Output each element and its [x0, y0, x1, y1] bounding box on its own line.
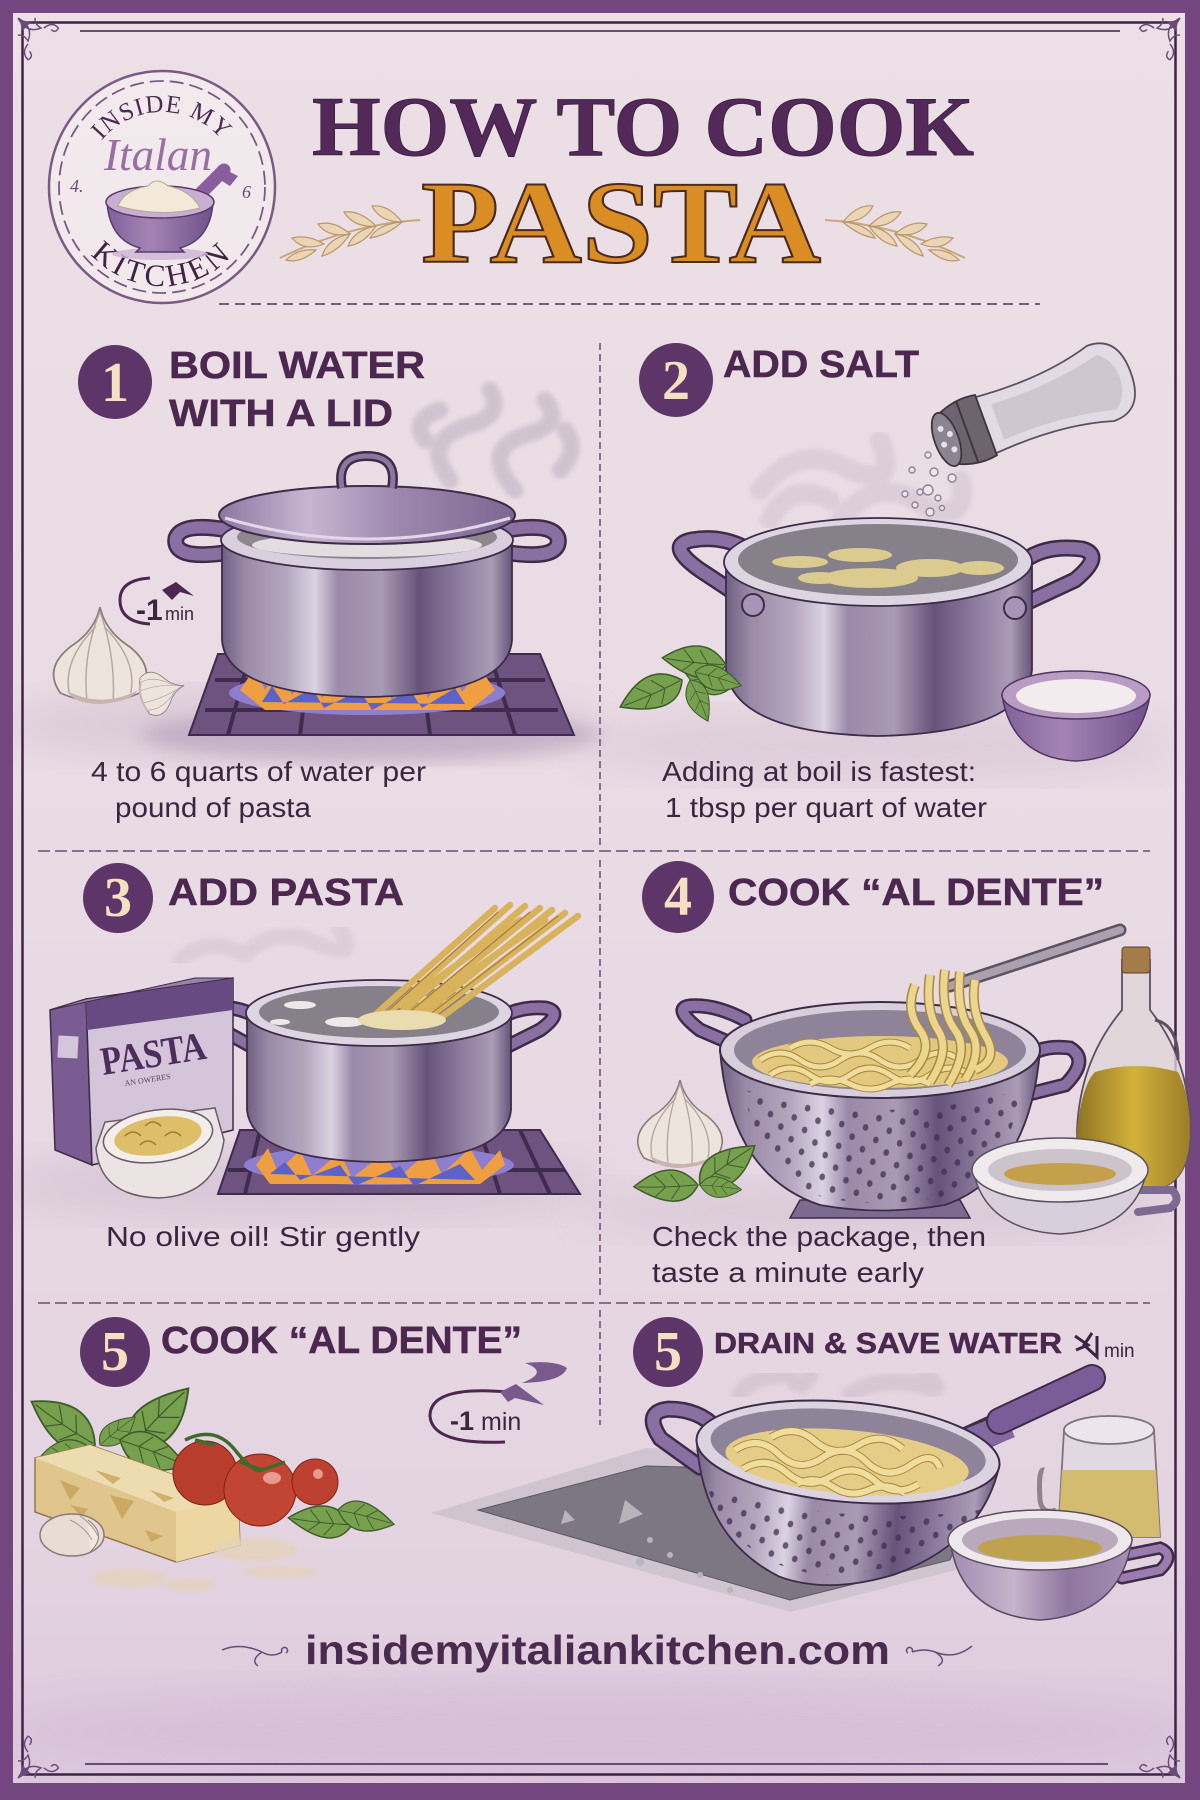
title line: how to cook: HOW TO COOK — [312, 80, 974, 174]
step number 4: 4 — [664, 866, 692, 928]
heading: add salt: ADD SALT — [723, 344, 919, 386]
title — [312, 80, 974, 288]
basil on cheese — [22, 1376, 204, 1484]
panel: step 4 cook al dente — [633, 861, 1190, 1288]
text: pasta tip: No olive oil! Stir gently — [106, 1221, 420, 1252]
heading: add pasta: ADD PASTA — [168, 872, 404, 914]
panel: step 5 left — [22, 1317, 567, 1591]
wheat right — [825, 206, 965, 261]
panel: step 3 add pasta — [50, 863, 580, 1252]
heading: cook al dente: COOK “AL DENTE” — [161, 1320, 522, 1362]
step number 2 — [639, 343, 713, 417]
garlic and basil — [633, 1080, 765, 1202]
sink — [431, 1448, 1000, 1612]
spaghetti bundle — [358, 905, 578, 1030]
pot with water — [210, 980, 554, 1162]
salt bowl — [1002, 671, 1150, 761]
pot with boiling water — [680, 518, 1092, 736]
steam — [180, 930, 347, 960]
burner grate — [218, 1130, 580, 1194]
text: timing tip — [652, 1221, 986, 1288]
step number 5: 5 — [654, 1321, 682, 1383]
title line: pasta: PASTA — [421, 157, 821, 288]
burner flames — [244, 1145, 514, 1186]
heading: cook al dente: COOK “AL DENTE” — [728, 872, 1104, 914]
text: water amount: 4 to 6 quarts of water per — [91, 756, 426, 787]
dish of pasta — [96, 1103, 224, 1198]
step number 5: 5 — [101, 1321, 129, 1383]
timer: one minute — [120, 578, 194, 627]
colander handle — [960, 1378, 1092, 1445]
logo text: kitchen: KITCHEN — [90, 240, 229, 286]
panel: step 5 right drain — [431, 1317, 1168, 1620]
heading: drain and save water: DRAIN & SAVE WATER — [714, 1328, 1062, 1360]
heading: boil water with a lid — [169, 345, 425, 435]
colander with noodles — [640, 1385, 1004, 1600]
text: salt amount: 1 tbsp per quart of water — [665, 792, 987, 823]
parmesan wedge — [35, 1445, 240, 1562]
cheese crumbs — [92, 1538, 318, 1591]
garlic bulb — [54, 607, 190, 719]
small bowl of oil — [972, 1138, 1177, 1234]
footer website — [222, 1627, 972, 1673]
step number 1: 1 — [101, 352, 129, 414]
step number 3 — [83, 863, 153, 933]
heading: boil water with a lid: WITH A LID — [169, 393, 393, 435]
step number 2: 2 — [662, 350, 690, 412]
wheat left — [280, 206, 420, 261]
basil sprig — [614, 640, 744, 725]
steam — [420, 390, 571, 490]
colander with pasta — [683, 1002, 1079, 1218]
text: water amount — [91, 756, 426, 823]
pot with lid — [176, 456, 558, 697]
step number 5 — [633, 1317, 703, 1387]
falling salt — [902, 452, 956, 543]
steam — [740, 1375, 936, 1395]
salt shaker — [922, 335, 1144, 481]
flourish right — [906, 1646, 972, 1666]
panel: step 2 add salt — [614, 335, 1150, 823]
timer: one minute — [430, 1362, 567, 1442]
timer: one minute: min — [481, 1408, 521, 1436]
logo badge — [48, 70, 276, 304]
logo marks: 4. — [70, 176, 84, 196]
timer: one minute: min — [165, 604, 194, 624]
website url: insidemyitaliankitchen.com — [305, 1627, 890, 1673]
heading: boil water with a lid: BOIL WATER — [169, 345, 425, 387]
timer mark: min — [1104, 1341, 1135, 1362]
burner flames — [229, 665, 505, 715]
timer: one minute: -1 — [136, 594, 163, 627]
timer: one minute: -1 — [450, 1406, 474, 1436]
pasta box small print: AN OWERES — [124, 1072, 171, 1088]
panel: step 1 boil water — [54, 345, 600, 823]
text: timing tip: taste a minute early — [652, 1257, 924, 1288]
basil by tomatoes — [286, 1495, 398, 1542]
text: salt amount: Adding at boil is fastest: — [662, 756, 976, 787]
text: timing tip: Check the package, then — [652, 1221, 986, 1252]
logo text: inside my: INSIDE MY — [90, 96, 233, 140]
steam — [760, 440, 962, 520]
step number 3: 3 — [104, 867, 132, 929]
timer mark — [1075, 1333, 1135, 1362]
logo text: italan: Italan — [103, 129, 212, 180]
fork with noodles — [910, 930, 1120, 1085]
step number 4 — [642, 861, 714, 933]
olive oil bottle — [1077, 947, 1190, 1188]
flourish left — [222, 1646, 288, 1666]
step number 5 — [80, 1317, 150, 1387]
small pot with pasta water — [948, 1510, 1168, 1620]
glass of pasta water — [1040, 1416, 1160, 1537]
burner grate — [140, 654, 600, 761]
garlic clove — [40, 1514, 104, 1556]
dividers — [38, 304, 1150, 1425]
logo mark six: 6 — [242, 182, 251, 202]
pasta box — [50, 978, 233, 1165]
text: salt amount — [662, 756, 987, 823]
text: water amount: pound of pasta — [115, 792, 312, 823]
icon: mortar and pestle — [106, 166, 238, 260]
pasta box label: PASTA — [97, 1023, 209, 1084]
step number 1 — [78, 345, 152, 419]
tomatoes — [173, 1434, 338, 1526]
